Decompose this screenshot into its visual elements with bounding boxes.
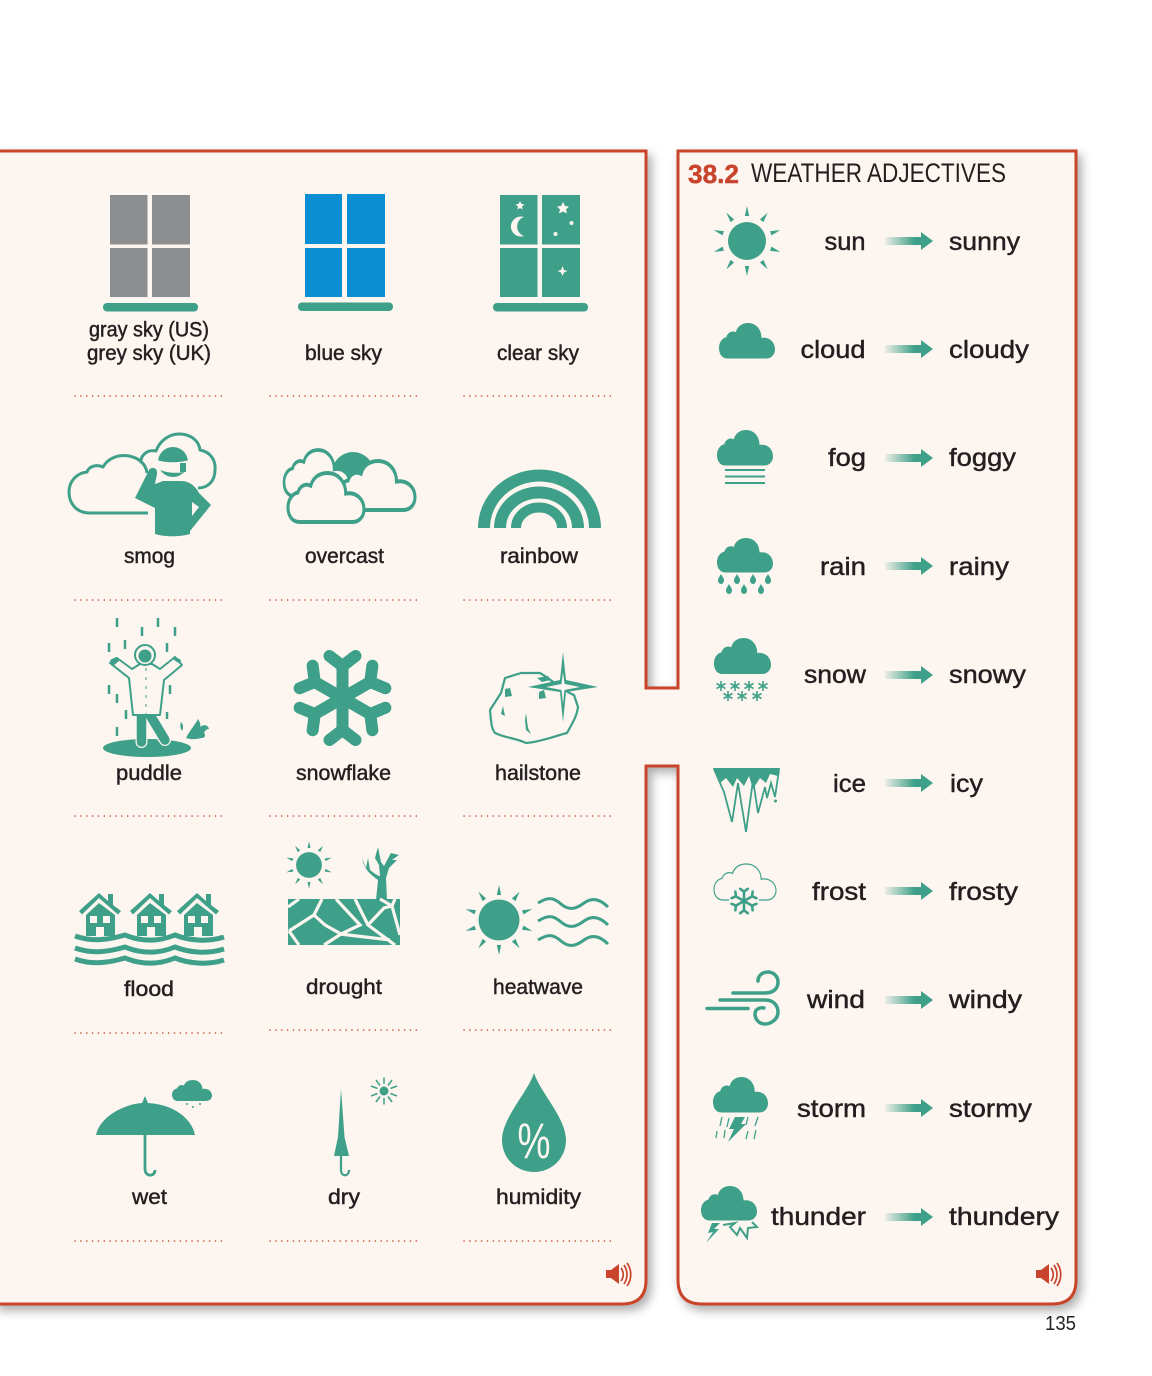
icon: rainbow [484,476,595,528]
cell: rainbow [464,476,612,600]
label: hailstone: hailstone [495,762,581,785]
word: sun: sun [824,228,866,256]
arrow [885,666,933,684]
arrow [885,1099,933,1117]
word: snow: snow [804,661,867,689]
word: frost: frost [812,878,866,906]
arrow [885,340,933,358]
icon: icicles [713,768,780,832]
icon: person in smog [69,434,215,536]
word: thunder: thunder [771,1203,866,1231]
cell: gray sky [75,195,224,396]
heading: 38.2 weather adjectives [688,158,1006,189]
icon: gray window [103,195,198,312]
adjective: stormy: stormy [949,1095,1033,1123]
icon: rain cloud [717,538,773,594]
icon: cloud [719,323,775,358]
heading: 38.2 weather adjectives: WEATHER ADJECTIVES [751,158,1006,188]
label: wet: wet [131,1186,167,1209]
icon: audio speaker [1036,1263,1061,1286]
cell: smog [69,434,224,600]
icon: closed umbrella with sun [334,1078,397,1175]
row: fog [717,430,1017,483]
word: wind: wind [806,986,865,1014]
icon: storm cloud [713,1077,768,1142]
label: heatwave: heatwave [493,976,583,999]
cell: heatwave [464,885,612,1030]
cell: hailstone [464,652,612,816]
icon: sun [713,206,781,276]
page number: 135 [1045,1313,1076,1335]
icon: snow cloud [714,638,771,701]
label: drought: drought [306,976,382,999]
panel outline: combined cream panel [0,151,1076,1304]
adjective: snowy: snowy [949,661,1027,689]
icon: night window [493,195,588,312]
adjective: frosty: frosty [949,878,1019,906]
icon: blue window [298,194,393,311]
label: grey sky: grey sky (UK) [87,342,211,365]
arrow [885,557,933,575]
label: humidity: humidity [496,1186,582,1209]
label: puddle: puddle [116,762,182,785]
adjective: rainy: rainy [949,553,1010,581]
cell: overcast [270,450,418,600]
label: dry: dry [328,1186,361,1209]
icon: audio speaker [606,1263,631,1286]
cell: humidity [464,1073,612,1241]
icon: person in rain coat in puddle [103,618,209,757]
row: ice [713,768,984,832]
cell: wet [75,1080,224,1241]
row: frost [714,864,1019,916]
icon: sun with heat waves [465,885,608,955]
label: overcast: overcast [305,545,384,568]
cell: puddle [75,618,224,816]
row: cloud [719,323,1030,364]
label: flood: flood [124,978,174,1001]
icon: clouds with sun [284,450,415,522]
panel: weather vocabulary grid [69,194,631,1286]
label: blue sky: blue sky [305,342,382,365]
word: ice: ice [833,770,866,798]
cell: flood [75,893,224,1033]
row: thunder [701,1186,1060,1243]
arrow [885,882,933,900]
arrow [885,449,933,467]
icon: flooded houses [75,893,224,963]
arrow [885,991,933,1009]
icon: thunder cloud [701,1186,757,1243]
label: gray sky: gray sky (US) [89,318,209,342]
row: rain [717,538,1010,594]
adjective: foggy: foggy [949,444,1017,472]
icon: frost cloud [714,864,776,916]
cell: drought [270,841,418,1030]
arrow [885,774,933,792]
word: cloud: cloud [800,336,866,364]
adjective: sunny: sunny [949,228,1021,256]
icon: open umbrella with rain cloud [96,1080,212,1175]
icon: snowflake [300,656,385,740]
cell: snowflake [270,656,418,816]
cell: blue sky [270,194,418,396]
icon: sun and cracked earth with dead tree [286,841,400,945]
row: snow [714,638,1027,701]
icon: fog cloud [717,430,773,483]
adjective: cloudy: cloudy [949,336,1030,364]
panel: weather adjectives [688,158,1061,1286]
arrow [885,232,933,250]
word: storm: storm [797,1095,866,1123]
label: smog: smog [124,545,175,568]
label: rainbow: rainbow [500,545,579,568]
icon: wind [707,972,778,1024]
adjective: thundery: thundery [949,1203,1060,1231]
arrow [885,1208,933,1226]
cell: clear sky [464,195,612,396]
icon: hailstone [490,652,598,743]
cell: dry [270,1078,418,1241]
word: fog: fog [828,444,866,472]
word: rain: rain [820,553,866,581]
label: snowflake: snowflake [296,762,391,785]
heading: 38.2 weather adjectives: 38.2 [688,159,739,189]
row: sun [713,206,1021,276]
label: clear sky: clear sky [497,342,579,365]
icon: water drop with percent [502,1073,566,1172]
adjective: windy: windy [948,986,1023,1014]
icon: water drop with percent: % [518,1113,550,1169]
adjective: icy: icy [950,770,984,798]
row: wind [707,972,1023,1024]
row: storm [713,1077,1033,1142]
